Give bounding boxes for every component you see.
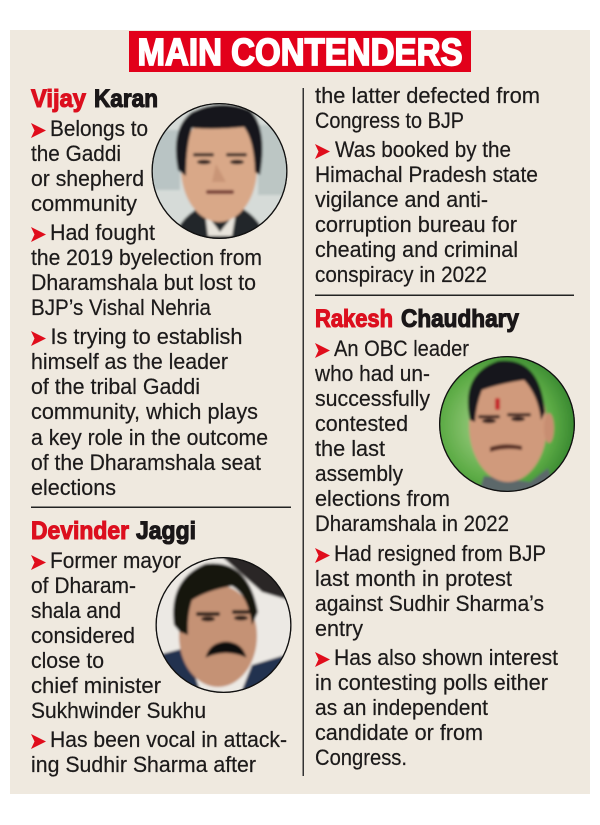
- bullet: OBC leader: the last: [315, 436, 385, 461]
- bullet: contesting interest: [315, 645, 558, 770]
- text block: Jaggi continued: the latter defected from: [315, 83, 540, 108]
- bullet: resigned from BJP: last month in protest: [315, 566, 512, 591]
- text block: Jaggi continued: [315, 83, 540, 287]
- bullet: contesting interest: Has also shown interest: [334, 645, 558, 670]
- bullet: former mayor: close to: [31, 648, 104, 673]
- bullet: resigned from BJP: entry: [315, 616, 363, 641]
- bullet: former mayor: considered: [31, 623, 135, 648]
- bullet: 2019 byelection: Dharamshala but lost to: [31, 270, 256, 295]
- bullet: OBC leader: who had un-: [314, 361, 430, 386]
- bullet: tribal leader: himself as the leader: [31, 349, 228, 374]
- bullet: tribal leader: a key role in the outcome: [31, 425, 268, 450]
- bullet: vocal critic: [31, 727, 287, 777]
- bullet: booked by bureau: conspiracy in 2022: [315, 262, 487, 287]
- bullet: former mayor: shala and: [31, 598, 121, 623]
- bullet: OBC leader: assembly: [315, 461, 403, 486]
- heading: Rakesh Chaudhary: Chaudhary: [401, 305, 519, 333]
- bullet: tribal leader: elections: [31, 475, 116, 500]
- bullet: contesting interest: Congress.: [315, 745, 407, 770]
- bullet: resigned from BJP: against Sudhir Sharma’s: [315, 591, 544, 616]
- bullet: community: community: [31, 191, 137, 216]
- portrait: Rakesh Chaudhary: [438, 355, 578, 495]
- bullet: resigned from BJP: Had resigned from BJP: [334, 541, 546, 566]
- heading: Devinder Jaggi: [31, 517, 196, 545]
- bullet: 2019 byelection: [31, 220, 262, 320]
- bullet: booked by bureau: Was booked by the: [335, 137, 511, 162]
- bullet: OBC leader: [314, 336, 509, 536]
- bullet: former mayor: of Dharam-: [31, 573, 136, 598]
- portrait: Vijay Karan: [150, 100, 290, 245]
- heading: Devinder Jaggi: Devinder: [31, 517, 129, 545]
- bullet: contesting interest: candidate or from: [315, 720, 483, 745]
- heading: Rakesh Chaudhary: [315, 305, 519, 333]
- bullet: former mayor: Former mayor: [50, 548, 181, 573]
- heading: Vijay Karan: Vijay: [31, 85, 86, 113]
- heading: Vijay Karan: [31, 85, 158, 113]
- bullet: OBC leader: elections from: [315, 486, 450, 511]
- bullet: booked by bureau: vigilance and anti-: [315, 187, 488, 212]
- bullet: OBC leader: An OBC leader: [334, 336, 469, 361]
- panel: Devinder Jaggi: [31, 517, 295, 777]
- bullet: community: Belongs to: [50, 116, 148, 141]
- bullet: booked by bureau: cheating and criminal: [315, 237, 518, 262]
- bullet: contesting interest: in contesting polls either: [315, 670, 548, 695]
- bullet: 2019 byelection: Had fought: [50, 220, 155, 245]
- heading: Devinder Jaggi: Jaggi: [136, 517, 196, 545]
- bullet: former mayor: chief minister: [31, 673, 161, 698]
- title: MAIN CONTENDERS: [138, 32, 462, 74]
- bullet: resigned from BJP: [315, 541, 546, 641]
- bullet: OBC leader: contested: [315, 411, 408, 436]
- bullet: OBC leader: Dharamshala in 2022: [315, 511, 509, 536]
- bullet: tribal leader: [31, 324, 268, 500]
- bullet: contesting interest: as an independent: [315, 695, 488, 720]
- heading: Vijay Karan: Karan: [94, 85, 158, 113]
- panel: Rakesh Chaudhary: [314, 305, 578, 770]
- portrait: Devinder Jaggi: [155, 555, 295, 695]
- bullet: former mayor: [31, 548, 206, 723]
- column divider: [302, 88, 304, 776]
- bullet: community: the Gaddi: [31, 141, 121, 166]
- bullet: 2019 byelection: the 2019 byelection from: [31, 245, 262, 270]
- bullet: tribal leader: community, which plays: [31, 399, 258, 424]
- bullet: tribal leader: of the tribal Gaddi: [31, 374, 200, 399]
- bullet: tribal leader: of the Dharamshala seat: [31, 450, 261, 475]
- bullet: booked by bureau: corruption bureau for: [315, 212, 517, 237]
- bullet: OBC leader: successfully: [315, 386, 430, 411]
- bullet: booked by bureau: Himachal Pradesh state: [315, 162, 538, 187]
- bullet: community: or shepherd: [31, 166, 144, 191]
- heading: Rakesh Chaudhary: Rakesh: [315, 305, 393, 333]
- bullet: former mayor: Sukhwinder Sukhu: [31, 698, 206, 723]
- bullet: booked by bureau: [315, 137, 538, 287]
- panel: Vijay Karan: [31, 85, 290, 500]
- bullet: vocal critic: ing Sudhir Sharma after: [31, 752, 256, 777]
- bullet: tribal leader: Is trying to establish: [50, 324, 242, 349]
- text block: Jaggi continued: Congress to BJP: [315, 108, 464, 133]
- bullet: vocal critic: Has been vocal in attack-: [50, 727, 287, 752]
- bullet: 2019 byelection: BJP’s Vishal Nehria: [31, 295, 212, 320]
- bullet: community: [31, 116, 148, 216]
